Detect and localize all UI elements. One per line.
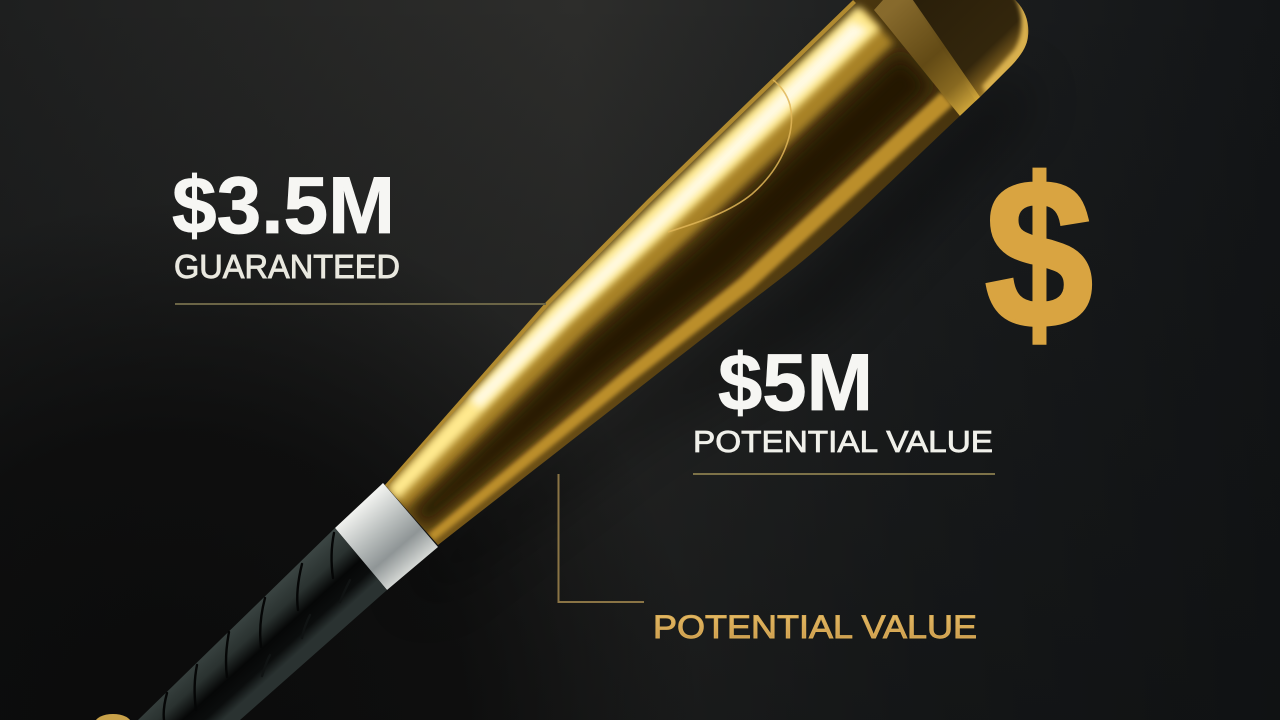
potential underline	[693, 473, 995, 475]
gold potential value label: POTENTIAL VALUE	[653, 609, 977, 645]
bright highlight	[388, 6, 880, 500]
gold band	[874, 0, 980, 116]
upper soft gold	[389, 9, 894, 508]
white ferrule	[335, 483, 438, 590]
baseball bat	[95, 0, 1050, 720]
centre shadow	[409, 52, 933, 530]
highlight core	[470, 22, 868, 408]
icon: dollar sign: $	[985, 135, 1093, 372]
lower gold stripe	[428, 92, 953, 541]
callout: potential value	[693, 338, 995, 475]
barrel cap	[913, 0, 1028, 101]
grip	[138, 528, 387, 720]
grip ribs	[164, 533, 350, 720]
barrel	[370, 0, 1050, 560]
seam arc	[668, 80, 791, 232]
callout: guaranteed	[172, 161, 546, 305]
top right rim glow	[982, 0, 1030, 98]
guaranteed leader line	[175, 303, 546, 305]
guaranteed amount: $3.5M	[172, 161, 395, 251]
potential amount: $5M	[718, 338, 873, 428]
upper rim	[385, 0, 856, 487]
guaranteed label: GUARANTEED	[174, 248, 400, 285]
elbow connector	[558, 474, 644, 602]
gold knob	[95, 714, 131, 720]
bat shadow	[420, 80, 1030, 600]
potential label: POTENTIAL VALUE	[693, 424, 993, 459]
